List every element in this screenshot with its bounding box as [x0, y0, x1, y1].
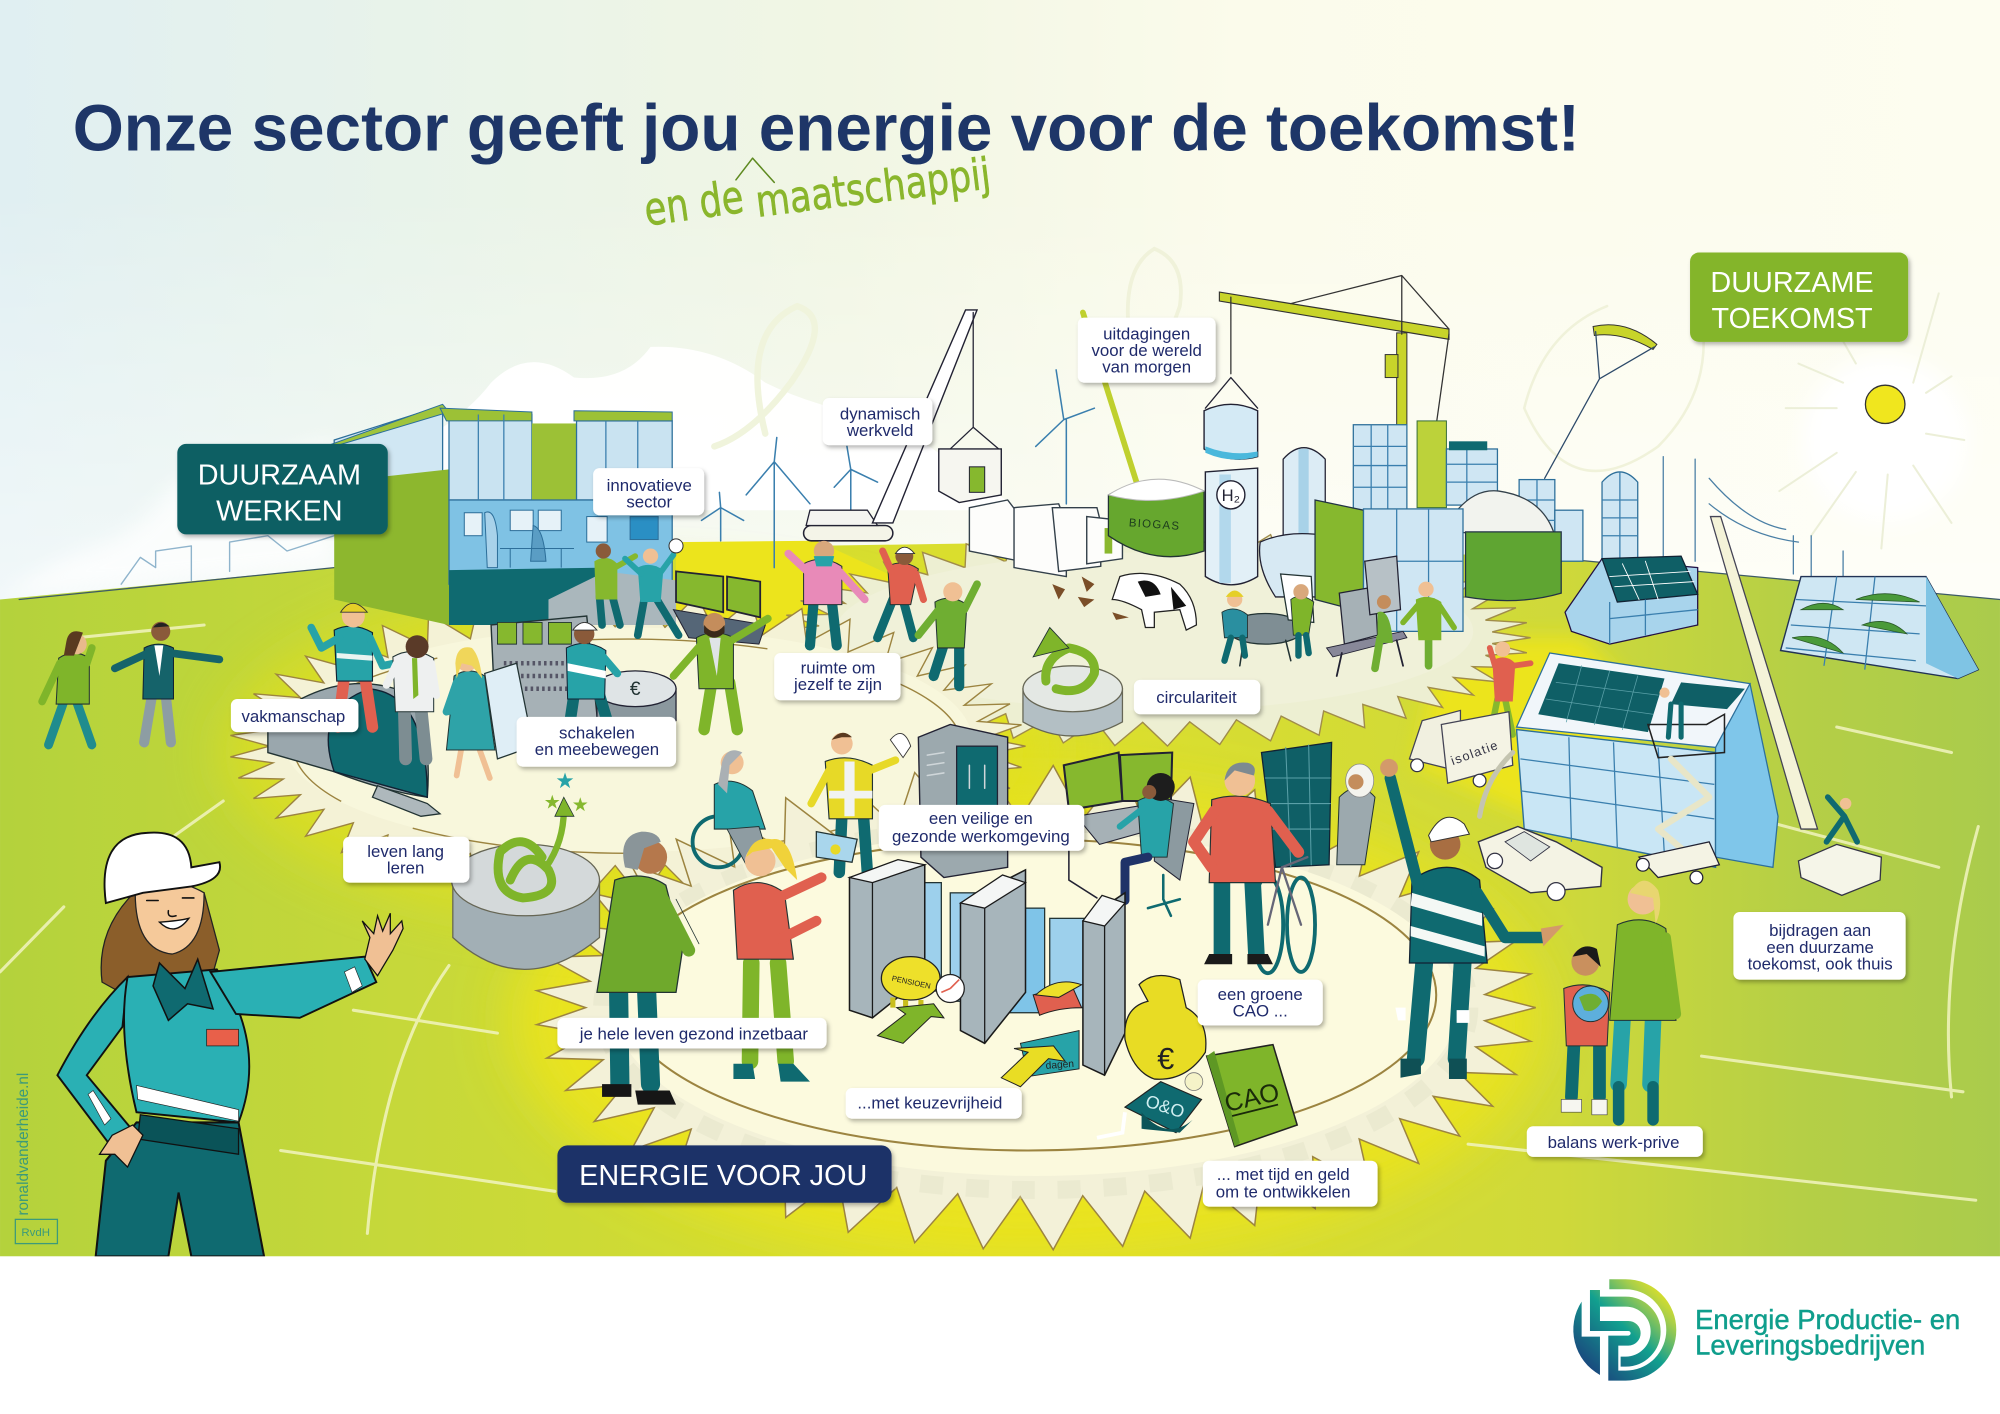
illustration: left office building [325, 404, 676, 625]
person: woman in hijab [1337, 764, 1375, 865]
label: met tijd en geld om te ontwikkelen: ... met tijd en geld [1217, 1165, 1350, 1184]
horizon line [19, 559, 2000, 599]
heading: duurzame toekomst: DUURZAME [1710, 267, 1874, 299]
label: bijdragen aan een duurzame toekomst: een duurzame [1766, 938, 1874, 957]
heading: duurzaam werken: WERKEN [216, 495, 343, 527]
woman: smile [159, 918, 189, 929]
label: met tijd en geld om te ontwikkelen [1203, 1161, 1378, 1207]
icon: sun [1865, 385, 1905, 423]
logo: wordmark [1695, 1304, 1960, 1361]
label: leven lang leren: leren [387, 859, 424, 878]
distant city left [121, 536, 334, 584]
person: man in shirt and tie [386, 635, 436, 759]
heading: duurzame toekomst: TOEKOMST [1711, 303, 1873, 335]
illustration: small solar house [1565, 556, 1698, 644]
illustration: modular white boxes [969, 500, 1122, 577]
person: two people with light bulb [594, 539, 683, 635]
icon: yellow arrow [1001, 1046, 1065, 1087]
person: man in suit arms wide [115, 622, 219, 742]
illustration: circular arrow on cylinder [1023, 628, 1122, 736]
handwritten insert: en de maatschappij [641, 149, 993, 237]
icon: O&O graduation cap [1097, 1073, 1203, 1138]
woman: left arm [57, 977, 131, 1148]
person: red vest woman [878, 547, 923, 638]
illustration: cow and chickens [1052, 573, 1196, 630]
illustration: biogas tank: BIOGAS [1128, 517, 1181, 533]
label: ruimte om jezelf te zijn: ruimte om [801, 658, 875, 677]
illustration: drum: € [630, 679, 641, 700]
label: balans werk-prive: balans werk-prive [1548, 1133, 1679, 1152]
icon: parasol and vrije dagen suitcase: vrije [1026, 1046, 1047, 1059]
illustration: isolatie van: isolatie [1449, 737, 1501, 768]
illustration: scissor lift with worker [1636, 687, 1724, 884]
woman: face [135, 883, 204, 954]
heading: energie voor jou [557, 1145, 892, 1203]
icon: O&O graduation cap: O&O [1143, 1091, 1187, 1122]
illustration: biogas tank [1083, 312, 1204, 557]
person: seated woman at computer [1064, 753, 1194, 916]
woman: hand raised [362, 913, 403, 976]
illustration: control panel [485, 616, 599, 759]
label: schakelen en meebewegen: en meebewegen [535, 740, 659, 759]
label: met keuzevrijheid: ...met keuzevrijheid [857, 1093, 1002, 1112]
label: bijdragen aan een duurzame toekomst: toekomst, ook thuis [1748, 954, 1893, 973]
label: schakelen en meebewegen [517, 717, 676, 767]
person: pink sweater man [788, 541, 865, 645]
label: je hele leven gezond inzetbaar [557, 1018, 827, 1048]
panel: gear energie voor jou [537, 766, 1536, 1250]
illustration: doorway blocks [849, 860, 1125, 1075]
illustration: desk workstation [1327, 556, 1454, 676]
illustration: kite [1545, 325, 1657, 478]
icon: green arrow [878, 1004, 944, 1043]
woman: reflective stripe [88, 967, 362, 1125]
woman: eyes [147, 898, 194, 916]
illustration: monitors centre left [673, 571, 765, 644]
label: balans werk-prive [1527, 1126, 1703, 1157]
heading: duurzaam werken: DUURZAAM [198, 460, 361, 492]
label: bijdragen aan een duurzame toekomst [1733, 912, 1906, 980]
label: circulariteit: circulariteit [1156, 688, 1237, 707]
illustration: glass building with dome [1315, 491, 1561, 631]
person: teal worker cheering [1380, 759, 1564, 1079]
person: green shirt man [918, 582, 977, 686]
logo: wordmark: Leveringsbedrijven [1695, 1330, 1925, 1361]
person: red man cheering [1490, 642, 1531, 737]
label: innovatieve sector [593, 468, 704, 515]
person: mother looking up [1610, 881, 1676, 1120]
background: pale ribbons and clouds [0, 249, 1704, 599]
panel: top gear people [788, 541, 1531, 737]
label: met keuzevrijheid [846, 1088, 1022, 1119]
woman: trousers [96, 1122, 264, 1256]
label: een veilige en gezonde werkomgeving [879, 805, 1084, 851]
label: schakelen en meebewegen: schakelen [559, 724, 635, 743]
label: een groene CAO: een groene [1218, 985, 1303, 1004]
heading: duurzaam werken [177, 444, 388, 534]
illustration: spiral on cylinder leven lang leren: ★ [544, 793, 561, 814]
label: innovatieve sector: sector [626, 493, 673, 512]
person: technician with wrench [311, 603, 395, 727]
label: uitdagingen voor de wereld van morgen: voor de wereld [1091, 341, 1202, 360]
person: man in red sweater [1194, 762, 1298, 964]
label: dynamisch werkveld: dynamisch [840, 405, 920, 424]
label: dynamisch werkveld: werkveld [846, 421, 913, 440]
yellow glow around gears [223, 541, 1658, 1256]
icon: parasol and vrije dagen suitcase: dagen [1045, 1059, 1074, 1072]
label: een groene CAO [1198, 980, 1323, 1025]
illustration: solar panel carried [1261, 742, 1332, 867]
footer: white band [0, 1256, 2000, 1414]
woman: helmet [105, 833, 220, 903]
handwritten insert: en de maatschappij: en de [641, 169, 747, 237]
woman: right arm [210, 957, 376, 1018]
label: uitdagingen voor de wereld van morgen [1078, 318, 1216, 383]
woman: belt [138, 1115, 239, 1154]
title: Onze sector geeft jou energie voor de toekomst! [73, 92, 1580, 165]
label: leven lang leren [343, 837, 469, 883]
icon: piggy bank pensioen: PENSIOEN [891, 974, 931, 991]
illustration: bicycle [1253, 857, 1315, 973]
person: blonde woman in blue [446, 647, 495, 778]
background: green ground [0, 541, 2000, 1256]
illustration: grey tunnel turbine [268, 684, 440, 816]
woman: collar [153, 959, 213, 1020]
power lines [1663, 457, 1843, 580]
heading: duurzame toekomst [1690, 253, 1908, 342]
label: circulariteit [1134, 680, 1260, 714]
label: een groene CAO: CAO ... [1233, 1002, 1288, 1021]
credit: signature box: RvdH [21, 1227, 50, 1239]
illustration: spiral on cylinder leven lang leren: ★ [555, 768, 575, 793]
label: een veilige en gezonde werkomgeving: een veilige en [929, 809, 1033, 828]
white ground lines [0, 625, 1978, 1233]
icon: money bag [1125, 975, 1206, 1079]
wind turbines [702, 370, 1094, 568]
label: een veilige en gezonde werkomgeving: gezonde werkomgeving [892, 827, 1070, 846]
illustration: large solar building [1517, 653, 1778, 867]
credit: signature box [15, 1219, 57, 1244]
panel: gear duurzame toekomst [779, 529, 1531, 746]
woman: torso [124, 969, 249, 1122]
illustration: right white crane [1710, 517, 1881, 895]
illustration: drum [594, 671, 676, 730]
illustration: control room inside building [464, 510, 658, 568]
illustration: spiral on cylinder leven lang leren: ★ [572, 795, 589, 816]
label: met tijd en geld om te ontwikkelen: om te ontwikkelen [1216, 1183, 1351, 1202]
label: dynamisch werkveld [823, 398, 932, 445]
woman: hand on hip [100, 1125, 143, 1167]
illustration: greenhouse triangle [1781, 577, 1978, 679]
sun glow and rays [1779, 293, 1968, 548]
illustration: hanging hydrogen tank [1204, 378, 1258, 460]
label: uitdagingen voor de wereld van morgen: uitdagingen [1103, 324, 1190, 343]
label: innovatieve sector: innovatieve [607, 476, 692, 495]
person: large worker woman [57, 833, 403, 1256]
credit: ronaldvanderheide.nl: ronaldvanderheide.nl [15, 1073, 32, 1216]
icon: CAO book [1207, 1045, 1297, 1147]
logo: wordmark: Energie Productie- en [1695, 1304, 1960, 1335]
icon: CAO book: CAO [1222, 1078, 1282, 1118]
background: horizon haze [0, 191, 2000, 599]
handwritten insert: en de maatschappij: maatschappij [753, 149, 993, 228]
person: boy with globe [1561, 946, 1610, 1115]
woman: hair back [101, 893, 219, 995]
logo: EPLB mark [1573, 1284, 1671, 1376]
icon: piggy bank pensioen [881, 957, 940, 1010]
label: uitdagingen voor de wereld van morgen: van morgen [1102, 357, 1191, 376]
woman: badge [207, 1029, 239, 1046]
person: woman in green phone [42, 631, 92, 745]
illustration: city towers [1353, 421, 1638, 561]
label: ruimte om jezelf te zijn [774, 653, 901, 700]
illustration: isolatie van [1409, 710, 1513, 816]
label: leven lang leren: leven lang [367, 842, 444, 861]
illustration: H2 tank [1205, 448, 1327, 597]
label: ruimte om jezelf te zijn: jezelf te zijn [793, 675, 882, 694]
illustration: H2 tank: H₂ [1222, 486, 1240, 505]
illustration: car [1478, 827, 1602, 900]
icon: clock [936, 974, 964, 1003]
person: hi-vis man with helmet [811, 733, 911, 872]
person: worker with helmet at panel [566, 622, 617, 730]
illustration: spiral on cylinder leven lang leren [452, 768, 599, 969]
illustration: yellow tower crane [1219, 276, 1449, 511]
person: woman in wheelchair [693, 750, 770, 867]
illustration: locker [918, 724, 1008, 878]
illustration: white crane with battery [804, 310, 1001, 541]
label: je hele leven gezond inzetbaar: je hele leven gezond inzetbaar [579, 1025, 808, 1044]
icon: parasol and vrije dagen suitcase [1020, 982, 1082, 1077]
person: bearded man in green suit [673, 613, 768, 730]
label: bijdragen aan een duurzame toekomst: bijdragen aan [1769, 921, 1871, 940]
heading: energie voor jou: ENERGIE VOOR JOU [579, 1160, 867, 1192]
illustration: meeting table [1222, 574, 1314, 666]
icon: money bag: € [1157, 1042, 1174, 1076]
label: vakmanschap [231, 699, 358, 732]
label: vakmanschap: vakmanschap [241, 707, 345, 726]
person: woman in red sweater with tablet [733, 832, 857, 1082]
person: man in green jacket from behind [597, 832, 699, 1105]
panel: gear duurzaam werken [230, 593, 1026, 899]
